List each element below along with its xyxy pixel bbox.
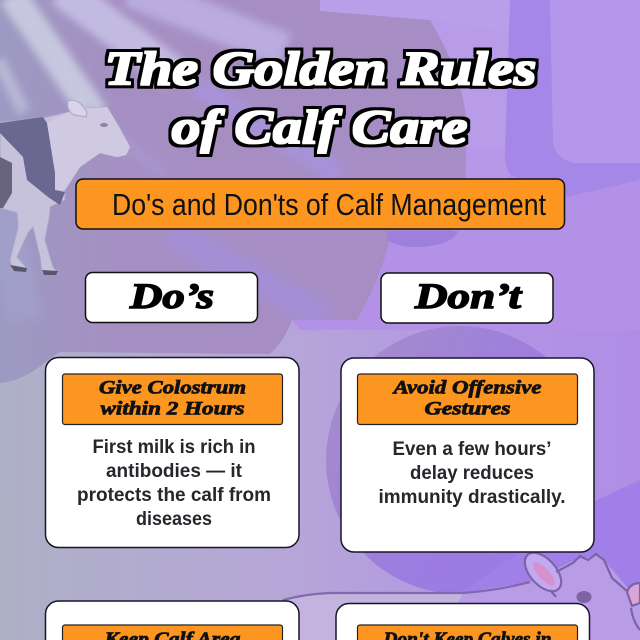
rule text: protects the calf from bbox=[77, 485, 271, 506]
panel: avoid offensive gestures bbox=[341, 358, 594, 552]
rule text: immunity drastically. bbox=[378, 487, 566, 508]
title: of Calf Care bbox=[172, 101, 468, 154]
foam blocks, right bbox=[320, 0, 512, 33]
heading: Don't: Don’t bbox=[414, 276, 522, 316]
light rays bbox=[0, 0, 340, 320]
panel: give colostrum bbox=[46, 358, 299, 548]
panel: don't keep calves in bbox=[336, 604, 590, 640]
rule heading: Give Colostrum bbox=[99, 378, 246, 398]
rule text bbox=[378, 439, 566, 508]
rule heading: Gestures bbox=[424, 398, 510, 420]
ear bbox=[518, 546, 568, 598]
panel: keep calf area bbox=[46, 601, 299, 640]
rule heading bbox=[62, 625, 282, 640]
title bbox=[104, 42, 536, 154]
heading: Don't bbox=[381, 273, 553, 323]
rule heading bbox=[358, 374, 578, 424]
subtitle banner: Do's and Don'ts of Calf Management bbox=[112, 187, 546, 222]
rule heading: Avoid Offensive bbox=[392, 378, 542, 398]
large disc behind right card bbox=[326, 326, 594, 594]
heading: Do's: Do’s bbox=[129, 276, 214, 316]
rule text: diseases bbox=[136, 509, 212, 530]
rule heading bbox=[62, 374, 282, 424]
rule heading bbox=[358, 625, 578, 640]
rule text bbox=[77, 437, 271, 530]
title: The Golden Rules bbox=[104, 42, 536, 96]
rule text: delay reduces bbox=[410, 463, 534, 484]
rule text: Even a few hours’ bbox=[392, 439, 552, 460]
rule text: First milk is rich in bbox=[92, 437, 256, 458]
icon: holstein cow bbox=[0, 100, 130, 275]
rule heading: within 2 Hours bbox=[100, 398, 244, 420]
subtitle banner bbox=[76, 179, 564, 229]
rule text: antibodies — it bbox=[106, 461, 243, 482]
calf illustration, bottom bbox=[283, 546, 640, 640]
heading: Do's bbox=[86, 272, 258, 322]
